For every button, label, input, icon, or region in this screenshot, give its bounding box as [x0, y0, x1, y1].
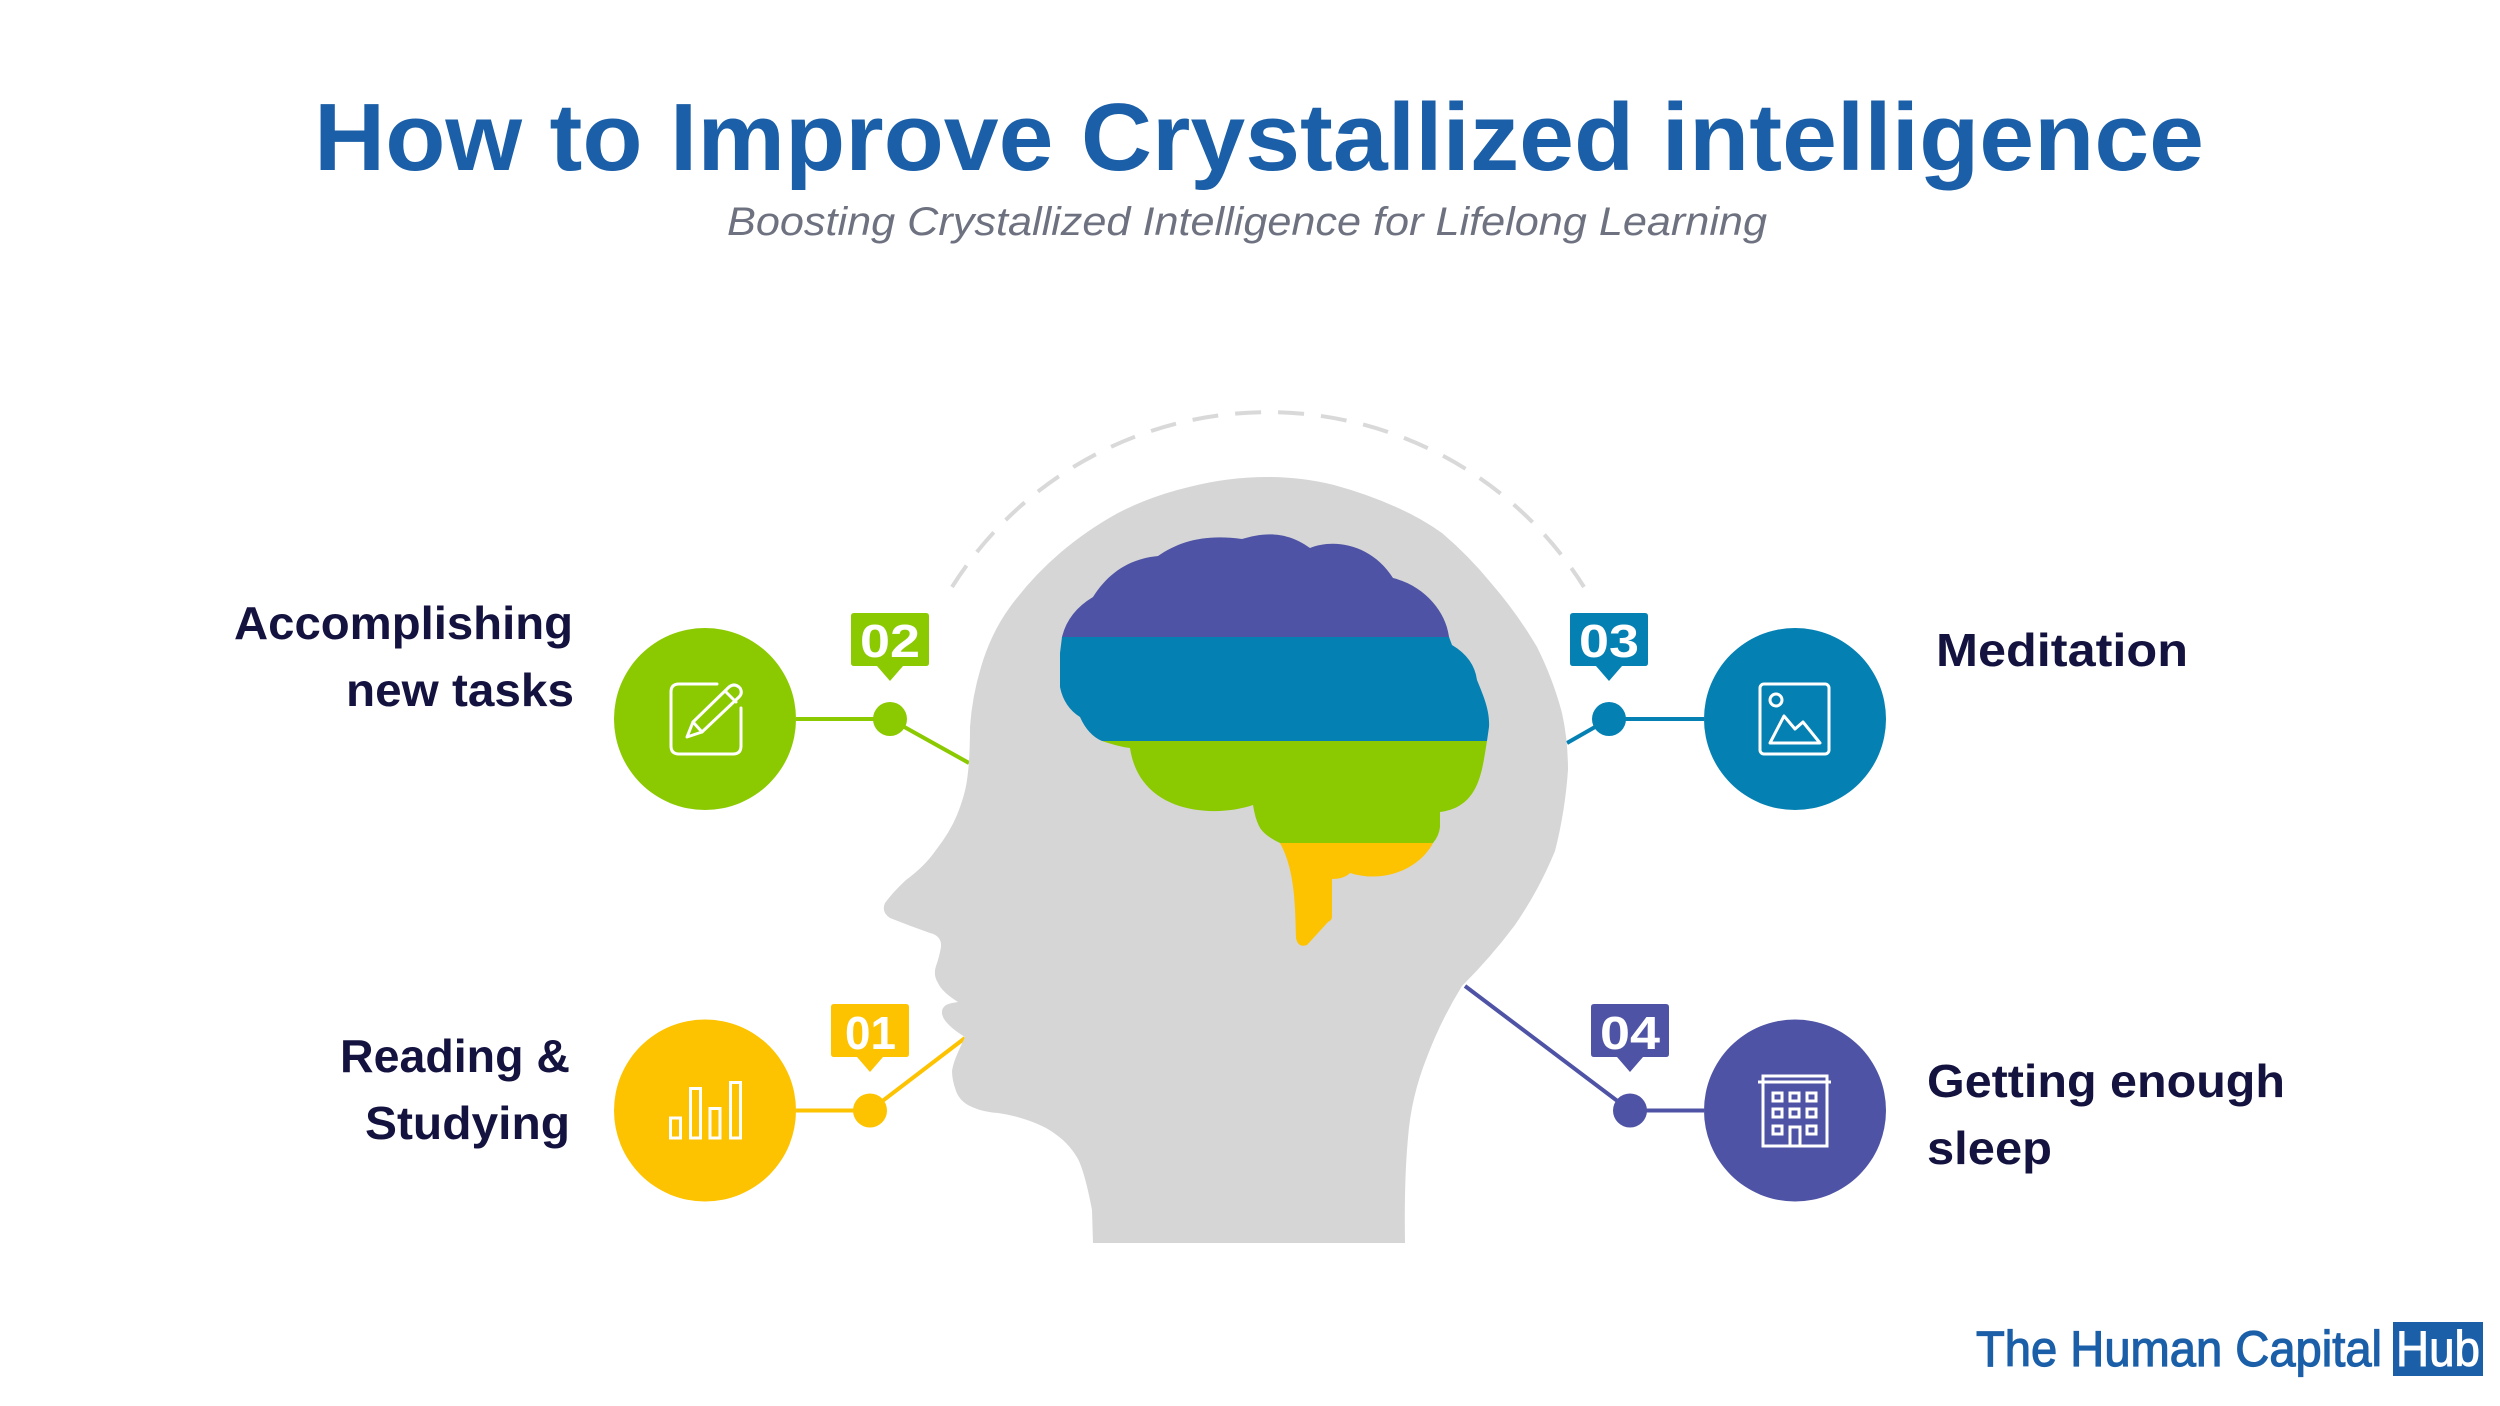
badge 03 [1570, 613, 1648, 681]
step 03: meditation [1570, 613, 1886, 810]
dashed arc above head [952, 412, 1584, 587]
label: accomplishing new tasks: Accomplishing [234, 597, 573, 649]
band: yellow [1280, 843, 1433, 946]
step 01: reading [614, 1004, 909, 1202]
badge 02: 02 [860, 615, 920, 667]
logo: The Human Capital [1976, 1321, 2382, 1377]
badge 04 [1591, 1004, 1669, 1072]
label: accomplishing new tasks: new tasks [346, 664, 574, 716]
band: purple [1062, 534, 1450, 638]
label: getting enough sleep: sleep [1927, 1122, 2052, 1174]
band: green [1102, 741, 1487, 843]
label: reading and studying [340, 1030, 570, 1149]
icon circle: picture [1704, 628, 1886, 810]
connector dot 01 [853, 1094, 887, 1128]
connector dot 03 [1592, 702, 1626, 736]
badge 01: 01 [845, 1007, 896, 1059]
label: getting enough sleep [1927, 1055, 2285, 1174]
icon circle: bar chart [614, 1020, 796, 1202]
label: reading and studying: Reading & [340, 1030, 570, 1082]
brain with coloured bands [1060, 534, 1490, 946]
logo: Hub [2396, 1321, 2480, 1377]
title: How to Improve Crystallized intelligence [314, 84, 2204, 191]
badge 02 [851, 613, 929, 681]
connector dot 04 [1613, 1094, 1647, 1128]
label: accomplishing new tasks [234, 597, 574, 716]
step 04: sleep [1591, 1004, 1886, 1202]
badge 03: 03 [1579, 615, 1639, 667]
step 02: tasks [614, 613, 929, 810]
label: reading and studying: Studying [365, 1097, 570, 1149]
icon circle: pencil and note [614, 628, 796, 810]
connector dot 02 [873, 702, 907, 736]
badge 04: 04 [1600, 1007, 1660, 1059]
label: getting enough sleep: Getting enough [1927, 1055, 2285, 1107]
icon circle: building [1704, 1020, 1886, 1202]
head silhouette [884, 477, 1568, 1243]
connector lines [796, 719, 1704, 1110]
badge 01 [831, 1004, 909, 1072]
subtitle: Boosting Crystallized Intelligence for Lifelong Learning [727, 200, 1767, 244]
band: blue [1040, 637, 1510, 741]
label: meditation: Meditation [1936, 624, 2188, 676]
